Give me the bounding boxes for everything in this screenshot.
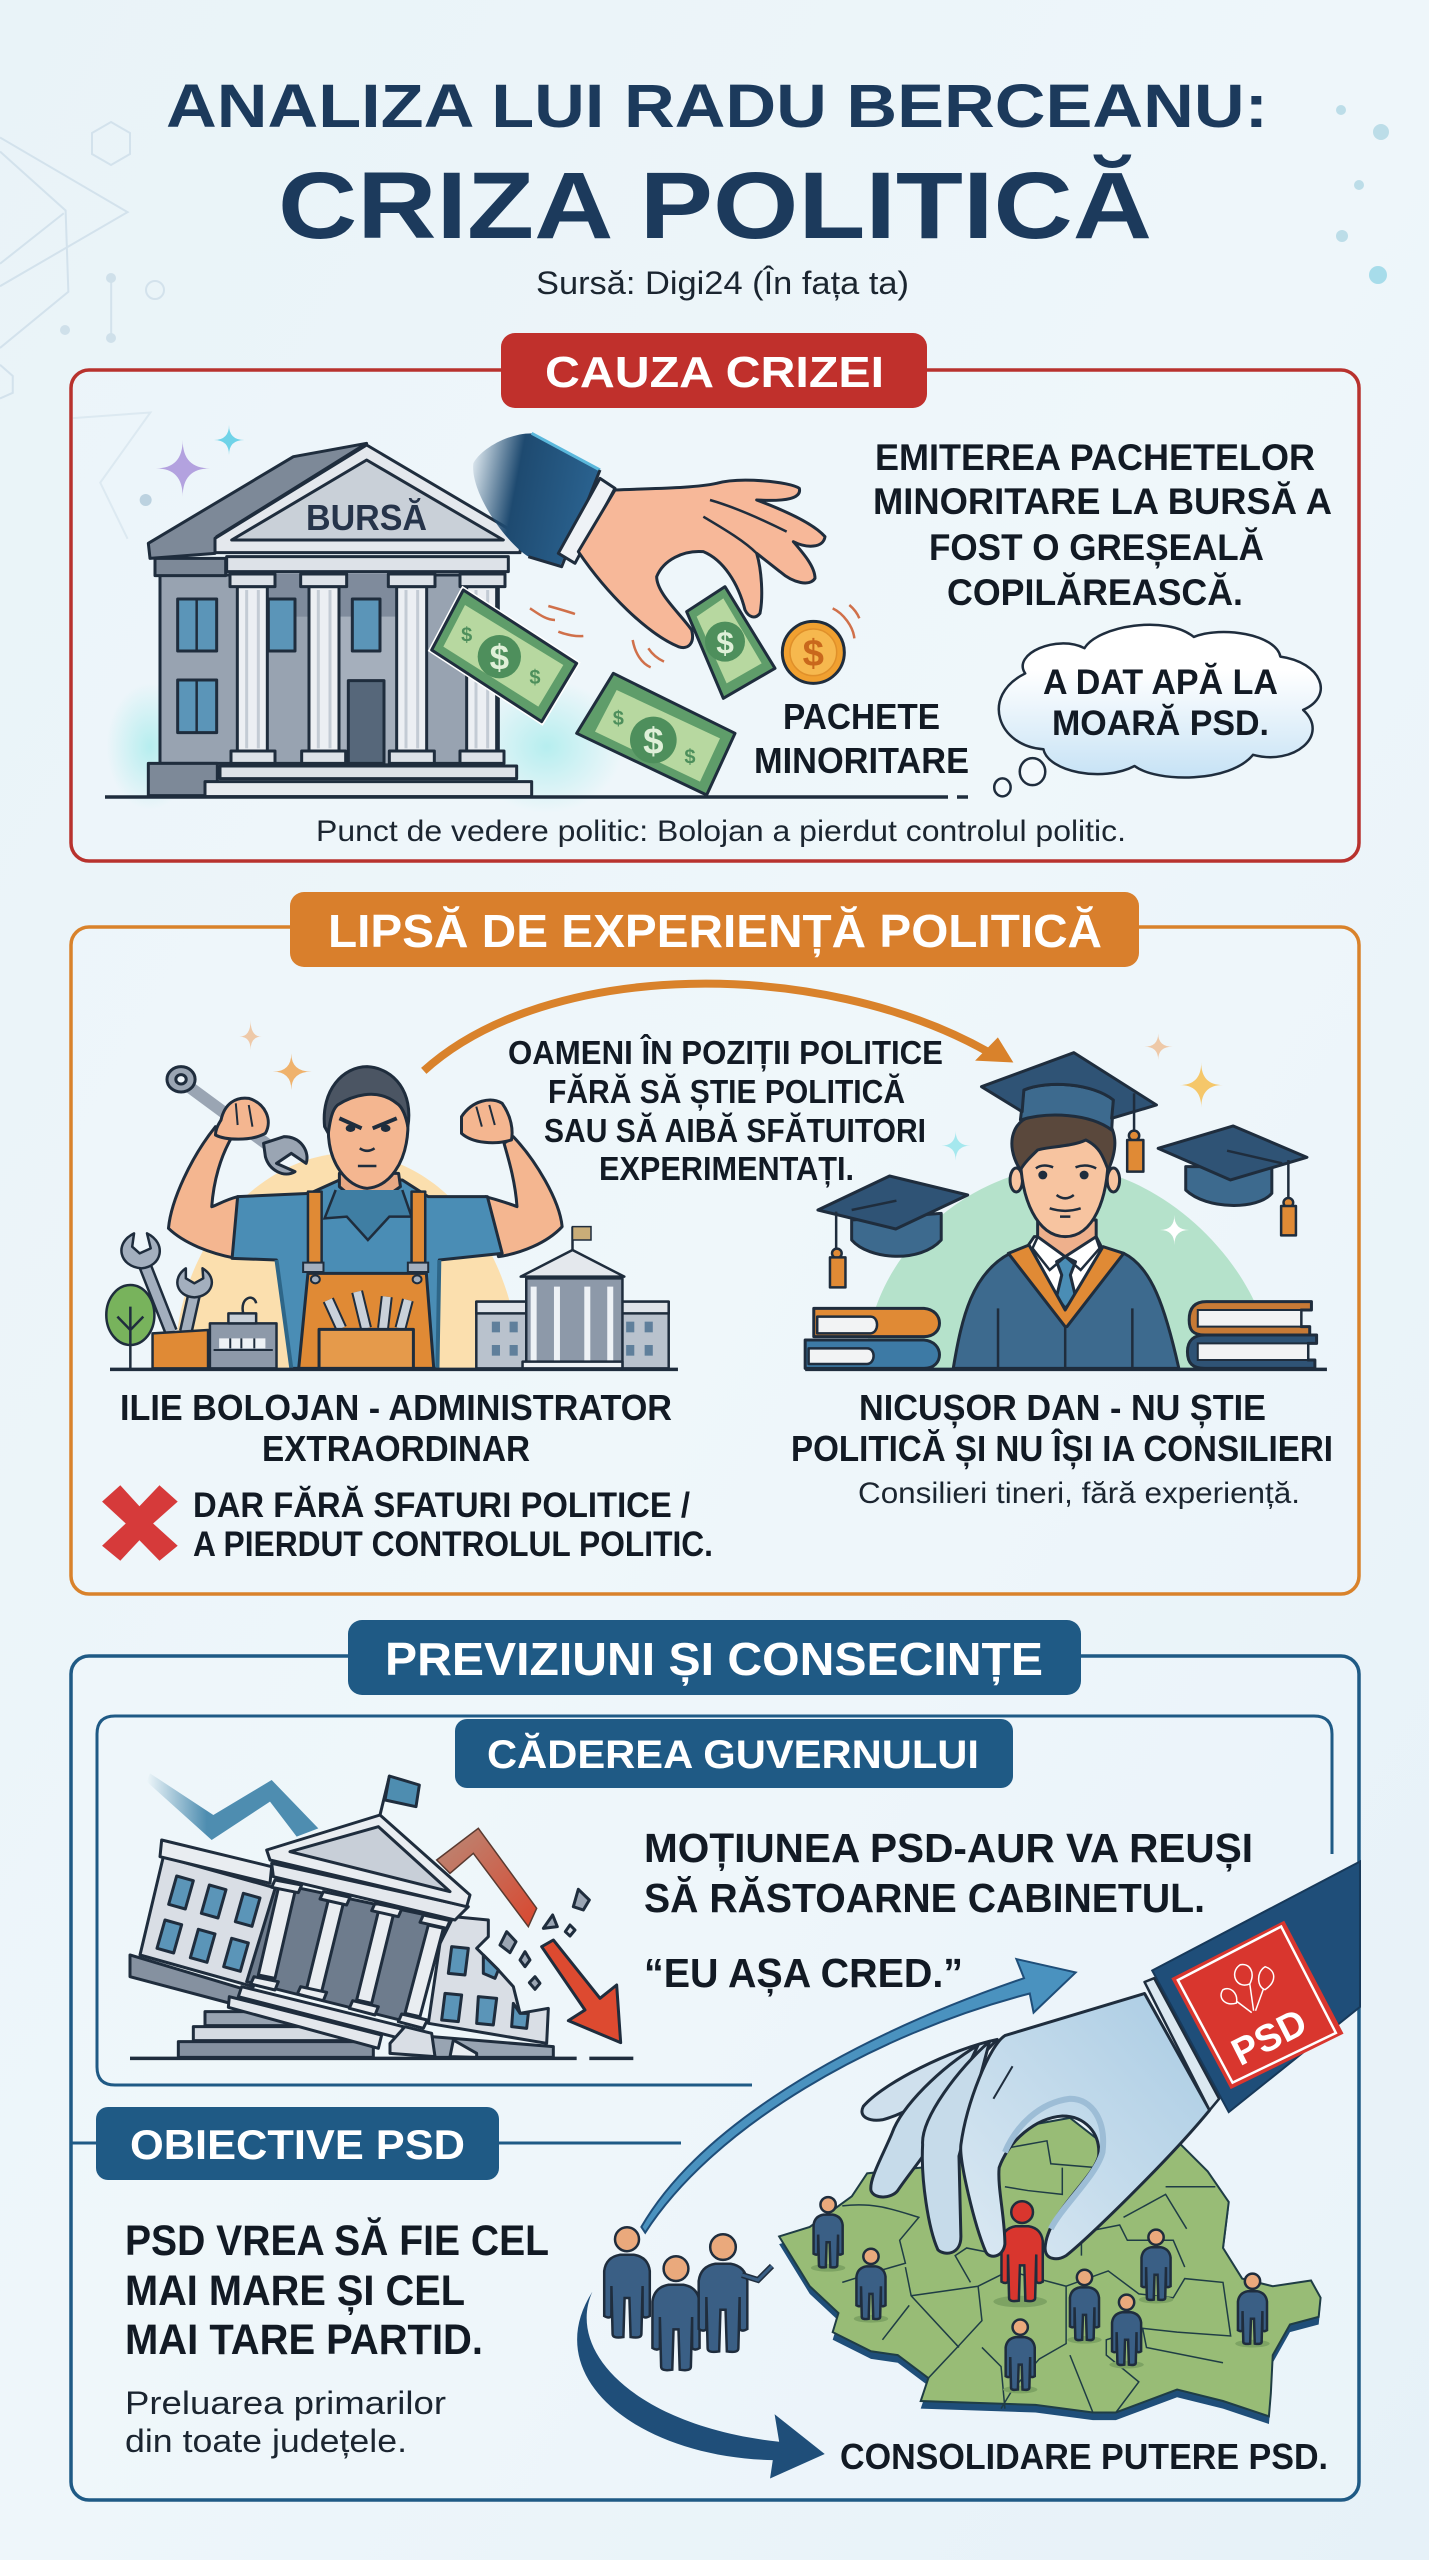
icon: hand dropping banknotes and coin: $ bbox=[684, 746, 696, 768]
text: Ilie Bolojan: ILIE BOLOJAN - ADMINISTRATOR bbox=[120, 1387, 672, 1428]
text: people in political positions: OAMENI ÎN POZIȚII POLITICE bbox=[508, 1034, 943, 1071]
callout: thought cloud: A DAT APĂ LA bbox=[1043, 663, 1278, 702]
panel: previziuni și consecințe bbox=[71, 1620, 1360, 2500]
title bbox=[166, 72, 1268, 259]
icon: hand dropping banknotes and coin: $ bbox=[803, 632, 824, 675]
icon: group of three politicians bbox=[604, 2227, 772, 2370]
icon: hand dropping banknotes and coin: $ bbox=[461, 625, 472, 647]
icon: hand dropping banknotes and coin: $ bbox=[529, 667, 541, 689]
heading: previziuni bbox=[348, 1620, 1081, 1695]
title: CRIZA POLITICĂ bbox=[278, 153, 1152, 259]
heading: previziuni: PREVIZIUNI ȘI CONSECINȚE bbox=[385, 1633, 1043, 1686]
text: people in political positions: FĂRĂ SĂ ȘTIE POLITICĂ bbox=[548, 1073, 905, 1111]
text: young advisers: Consilieri tineri, fără experiență. bbox=[858, 1477, 1300, 1510]
arrow: from Bolojan to Dan bbox=[424, 984, 1013, 1071]
text: main cause: FOST O GREȘEALĂ bbox=[929, 527, 1264, 568]
heading: lipsă de experiență bbox=[290, 892, 1139, 967]
sub-panel: căderea guvernului bbox=[97, 1716, 1332, 2085]
text: bursă label: BURSĂ bbox=[306, 497, 427, 538]
text: no-confidence motion bbox=[644, 1825, 1253, 1921]
icon: collapsing government building with falling charts bbox=[130, 1773, 633, 2058]
illustration: map of Romania with PSD hand and mayors bbox=[641, 1861, 1360, 2424]
text: political point of view: Punct de vedere politic: Bolojan a pierdut controlul politic. bbox=[316, 815, 1126, 848]
background decoration: network lines and dots bbox=[0, 105, 1389, 539]
text: Nicușor Dan bbox=[791, 1387, 1333, 1469]
text: people in political positions: EXPERIMENTAȚI. bbox=[599, 1150, 854, 1187]
text: PSD goal: PSD VREA SĂ FIE CEL bbox=[125, 2217, 549, 2265]
text: people in political positions: SAU SĂ AIBĂ SFĂTUITORI bbox=[544, 1112, 926, 1149]
icon: Ilie Bolojan as a mechanic with tools bbox=[106, 1020, 678, 1369]
text: PSD goal: MAI MARE ȘI CEL bbox=[125, 2267, 465, 2315]
callout: thought cloud: MOARĂ PSD. bbox=[1052, 704, 1269, 743]
icon: Nicușor Dan as a graduate with caps and books bbox=[805, 1033, 1327, 1369]
heading: cauza crizei bbox=[501, 333, 927, 408]
icon: stock exchange building bbox=[107, 425, 623, 813]
panel: lipsă de experiență politică bbox=[71, 892, 1359, 1594]
subheading: obiective PSD: OBIECTIVE PSD bbox=[130, 2121, 465, 2168]
panel: cauza crizei bbox=[71, 333, 1359, 861]
text: PSD goal: MAI TARE PARTID. bbox=[125, 2316, 483, 2364]
source line: Sursă: Digi24 (În fața ta) bbox=[536, 265, 909, 301]
text: taking over mayors: Preluarea primarilor bbox=[125, 2385, 446, 2421]
text: quote: “EU AȘA CRED.” bbox=[644, 1950, 963, 1996]
text: main cause: COPILĂREASCĂ. bbox=[947, 572, 1243, 613]
text: taking over mayors bbox=[125, 2385, 446, 2459]
icon: hand dropping banknotes and coin: $ bbox=[643, 720, 664, 761]
arrow: dark curved arrow to consolidation bbox=[577, 2292, 825, 2479]
text: Ilie Bolojan: EXTRAORDINAR bbox=[262, 1428, 530, 1469]
callout: thought cloud bbox=[994, 625, 1321, 796]
text: Nicușor Dan: POLITICĂ ȘI NU ÎȘI IA CONSILIERI bbox=[791, 1427, 1333, 1469]
ground line bbox=[105, 795, 968, 799]
text: main cause: MINORITARE LA BURSĂ A bbox=[873, 481, 1332, 522]
icon: hand dropping banknotes and coin: $ bbox=[490, 638, 509, 677]
text: no-confidence motion: SĂ RĂSTOARNE CABINETUL. bbox=[644, 1875, 1205, 1921]
text: PSD goal bbox=[125, 2217, 549, 2364]
text: taking over mayors: din toate județele. bbox=[125, 2423, 407, 2459]
text: but without advice: A PIERDUT CONTROLUL POLITIC. bbox=[193, 1525, 713, 1564]
icon: hand dropping banknotes and coin: $ bbox=[716, 624, 734, 660]
text: PSD badge: PSD bbox=[1225, 2001, 1314, 2074]
text: pachete minoritare label: PACHETE bbox=[783, 696, 940, 737]
text: but without advice bbox=[193, 1486, 713, 1564]
icon: hand dropping banknotes and coin bbox=[432, 433, 859, 795]
text: pachete minoritare label bbox=[754, 696, 969, 781]
icon: hand dropping banknotes and coin: $ bbox=[613, 708, 624, 730]
text: main cause: EMITEREA PACHETELOR bbox=[875, 437, 1315, 478]
text: no-confidence motion: MOȚIUNEA PSD-AUR VA REUȘI bbox=[644, 1825, 1253, 1871]
text: but without advice: DAR FĂRĂ SFATURI POLITICE / bbox=[193, 1486, 690, 1525]
subheading: căderea guvernului: CĂDEREA GUVERNULUI bbox=[487, 1732, 979, 1777]
subheading: căderea guvernului bbox=[455, 1719, 1013, 1788]
icon: red cross bbox=[102, 1485, 178, 1561]
heading: cauza crizei: CAUZA CRIZEI bbox=[545, 348, 884, 397]
text: Nicușor Dan: NICUȘOR DAN - NU ȘTIE bbox=[859, 1387, 1266, 1428]
text: Ilie Bolojan bbox=[120, 1387, 672, 1469]
title: ANALIZA LUI RADU BERCEANU: bbox=[166, 72, 1268, 140]
text: pachete minoritare label: MINORITARE bbox=[754, 740, 969, 781]
subheading: obiective PSD bbox=[71, 2107, 681, 2180]
text: people in political positions bbox=[508, 1034, 943, 1187]
text: consolidating PSD power: CONSOLIDARE PUTERE PSD. bbox=[840, 2436, 1328, 2477]
text: main cause bbox=[873, 437, 1332, 613]
heading: lipsă de experiență: LIPSĂ DE EXPERIENȚĂ POLITICĂ bbox=[328, 905, 1102, 958]
